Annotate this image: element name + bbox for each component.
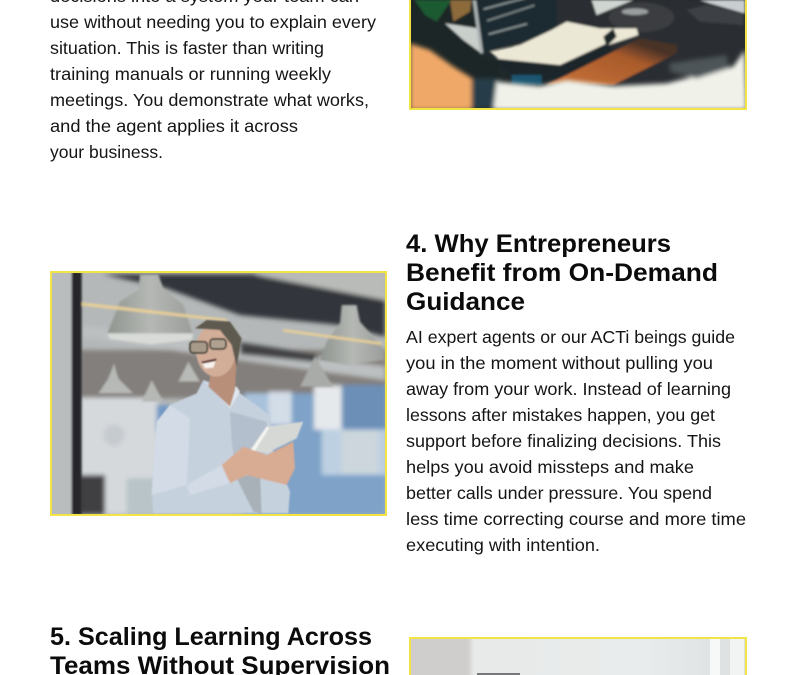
text block: section 4 body: executing with intention. xyxy=(406,535,600,555)
text block: section 3 body: and the agent applies it across xyxy=(50,116,298,136)
image: smiling man holding a tablet in an office xyxy=(50,272,387,515)
text block: section 3 body: training manuals or running weekly xyxy=(50,64,331,84)
text block: section 3 body: your business. xyxy=(50,142,163,162)
image: keyboard and laptop on desk xyxy=(410,0,747,110)
heading: section 5 xyxy=(50,623,390,675)
text block: section 4 body: helps you avoid missteps and make xyxy=(406,457,694,477)
heading: section 4 xyxy=(406,230,718,316)
text block: section 3 body: meetings. You demonstrate what works, xyxy=(50,90,369,110)
text block: section 4 body: away from your work. Instead of learning xyxy=(406,379,731,399)
image: bright white room xyxy=(409,637,747,675)
text block: section 3 body: use without needing you to explain every xyxy=(50,12,376,32)
text block: section 4 body: you in the moment without pulling you xyxy=(406,353,713,373)
text block: section 3 body: situation. This is faster than writing xyxy=(50,38,324,58)
text block: section 4 body: AI expert agents or our ACTi beings guide xyxy=(406,327,735,347)
text block: section 4 body xyxy=(406,327,746,555)
heading: section 4: 4. Why Entrepreneurs xyxy=(406,230,671,258)
heading: section 4: Guidance xyxy=(406,288,525,316)
text block: section 4 body: better calls under pressure. You spend xyxy=(406,483,712,503)
heading: section 5: 5. Scaling Learning Across xyxy=(50,623,372,651)
text block: section 4 body: less time correcting course and more time xyxy=(406,509,746,529)
text block: section 4 body: lessons after mistakes happen, you get xyxy=(406,405,715,425)
heading: section 4: Benefit from On-Demand xyxy=(406,259,718,287)
text block: section 3 body xyxy=(50,0,376,162)
text block: section 4 body: support before finalizing decisions. This xyxy=(406,431,721,451)
